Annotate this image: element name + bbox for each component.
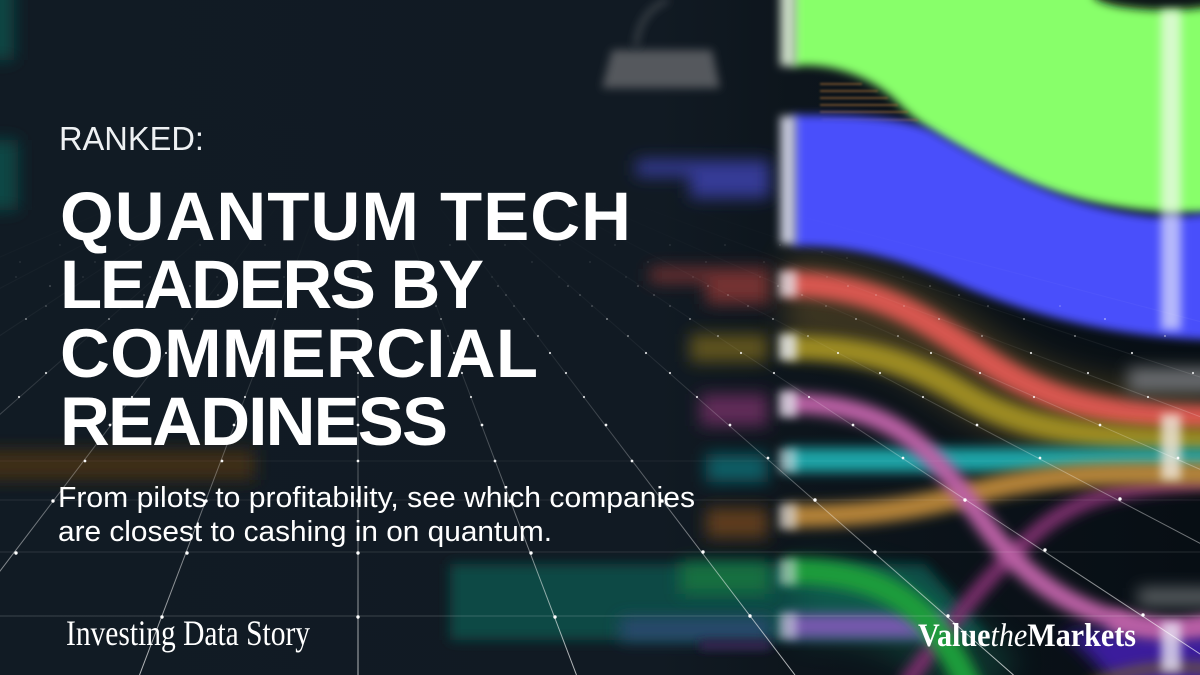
flow: bottom right purple: [1060, 632, 1200, 675]
brand logo: ValuetheMarkets: [918, 618, 1136, 654]
flow: green small: [785, 571, 972, 675]
blurred label: orange: [706, 508, 768, 538]
blurred right lower label: [1138, 588, 1200, 606]
flow: purple: [785, 614, 945, 638]
blurred label: violet under band: [700, 640, 770, 650]
flow: bottom right yellow sliver: [1090, 667, 1200, 675]
blurred label: teal: [706, 454, 768, 482]
small heading: RANKED:: [59, 120, 204, 157]
main title: LEADERS BY: [60, 246, 484, 323]
main title: QUANTUM TECH: [60, 178, 631, 255]
blurred label: yellow: [690, 334, 768, 362]
far grid dots: [16, 245, 1193, 617]
blurred block: far-left orange band: [0, 450, 255, 480]
blurred sankey chart: [779, 0, 1200, 675]
subtitle: From pilots to profitability, see which companies: [58, 482, 695, 514]
blurred label: green: [680, 562, 770, 594]
blurred annotation text: [602, 50, 720, 88]
horizontal grid lines: [0, 461, 1200, 616]
main title: READINESS: [60, 383, 448, 460]
flow: red: [785, 284, 1200, 418]
blurred annotation arc: [636, 0, 668, 46]
left node bars: [779, 0, 797, 639]
striped remnant under green: [820, 84, 918, 120]
dark blob top right: [1093, 0, 1200, 10]
flow haze behind ribbons: [785, 300, 1200, 675]
blurred right labels: [1128, 368, 1200, 392]
series label: Investing Data Story: [66, 613, 310, 653]
flow: orange: [785, 473, 1200, 516]
blurred block: far-left teal middle: [0, 140, 18, 210]
subtitle: are closest to cashing in on quantum.: [58, 516, 552, 548]
blurred label: magenta: [700, 394, 768, 426]
flow: green large: [793, 0, 1200, 213]
right node bars: [1161, 10, 1181, 672]
main title: [60, 178, 631, 460]
blurred label: indigo: [636, 160, 770, 198]
blurred block: teal green band: [450, 564, 990, 640]
flow: pink: [785, 403, 1200, 631]
blurred block: far-left teal top: [0, 0, 14, 60]
blurred side labels: [0, 0, 990, 650]
flow: yellow: [785, 347, 1200, 441]
flow: dark magenta: [905, 480, 1200, 675]
flow: bottom right pink on top: [1110, 620, 1200, 630]
blurred label: purple: [620, 618, 770, 640]
flow: blue large: [793, 115, 1200, 340]
main title: COMMERCIAL: [60, 315, 538, 392]
subtitle: [58, 482, 695, 548]
flow: teal: [785, 448, 1200, 472]
blurred label: red: [650, 268, 770, 304]
